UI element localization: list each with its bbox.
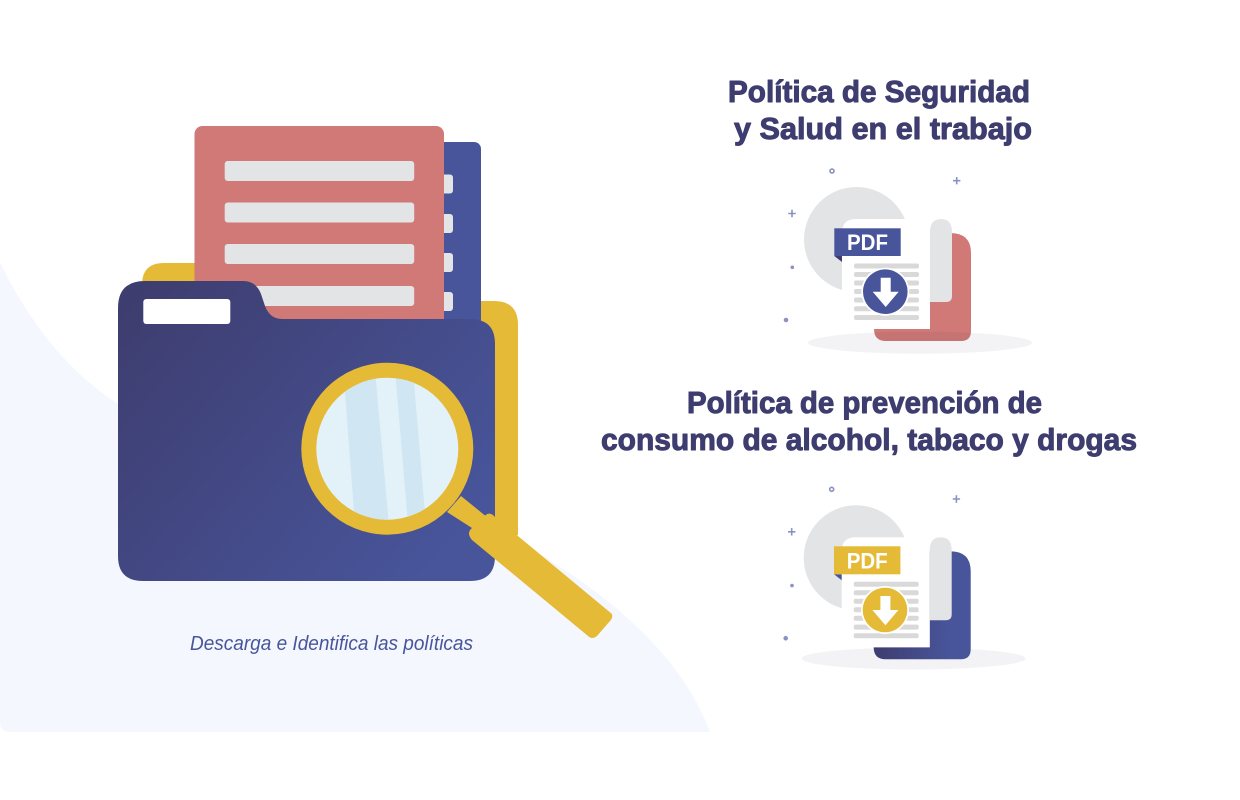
heading: Política de prevención de consumo <box>601 385 1137 457</box>
scroll <box>930 219 952 302</box>
text lines <box>854 582 919 638</box>
heading: Política de prevención de consumo: Política de prevención de <box>687 385 1042 420</box>
lens <box>301 363 473 535</box>
blue document <box>300 142 481 342</box>
download circle <box>861 268 909 316</box>
folder back <box>142 263 518 535</box>
download circle <box>861 586 909 634</box>
heading: Política de Seguridad y Salud en el trabajo: y Salud en el trabajo <box>734 111 1032 146</box>
PDF tag: PDF <box>847 548 888 573</box>
background blob <box>0 262 710 732</box>
folder label <box>143 299 230 324</box>
handle <box>447 496 612 638</box>
sparkles <box>784 487 960 640</box>
heading: Política de Seguridad y Salud en el trabajo: Política de Seguridad <box>728 74 1030 109</box>
shadow <box>808 332 1032 354</box>
heading: Política de Seguridad y Salud en el trabajo <box>728 74 1032 146</box>
icon: magnifying glass <box>301 363 612 638</box>
icon: PDF download yellow <box>784 487 1026 670</box>
shadow <box>802 648 1026 670</box>
PDF tag: PDF <box>847 230 888 255</box>
caption: Descarga e Identifica las políticas <box>190 633 473 655</box>
grey circle <box>804 505 909 610</box>
PDF tag <box>834 228 901 262</box>
scroll <box>930 537 952 620</box>
grey circle <box>804 187 909 292</box>
heading: Política de prevención de consumo: consumo de alcohol, tabaco y drogas <box>601 422 1137 457</box>
PDF tag <box>834 546 900 580</box>
paper <box>842 537 941 647</box>
sparkles <box>784 169 960 322</box>
pink document <box>194 126 444 346</box>
folder front <box>118 281 495 581</box>
icon: PDF download red <box>784 169 1032 354</box>
paper <box>842 219 941 329</box>
back sheet <box>874 233 971 341</box>
text lines <box>854 264 919 320</box>
back sheet <box>874 551 971 659</box>
illustration: folder with documents <box>118 126 518 581</box>
